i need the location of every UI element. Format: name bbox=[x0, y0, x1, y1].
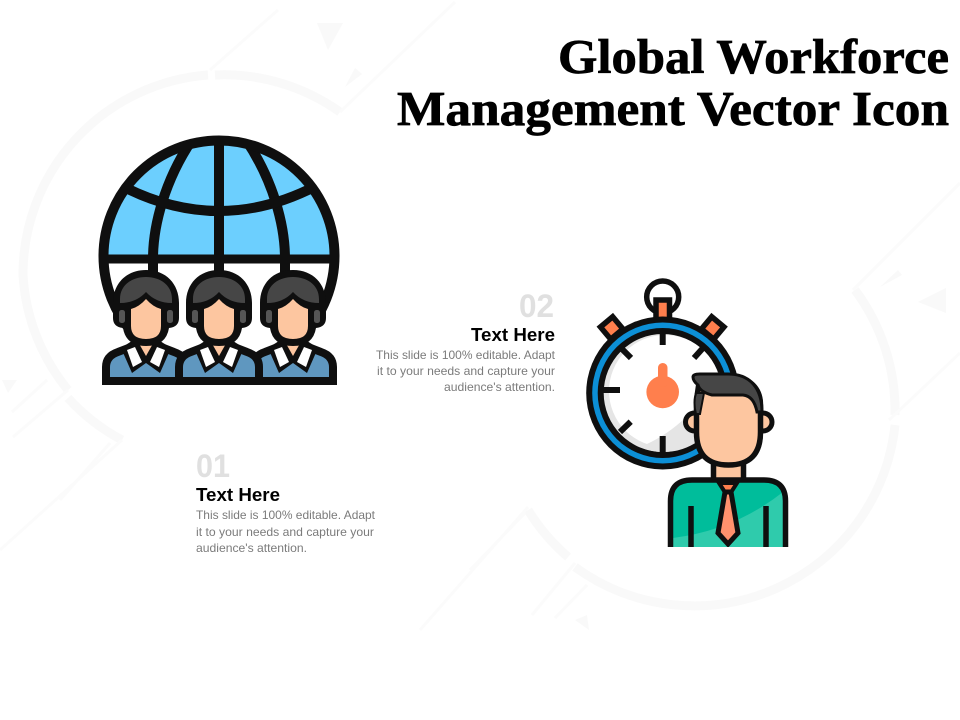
worker: left bbox=[106, 270, 186, 381]
icon: globe bbox=[98, 136, 340, 330]
text block 01: 01 bbox=[196, 448, 230, 484]
title: Management Vector Icon bbox=[397, 81, 949, 136]
icon: stopwatch bbox=[586, 281, 739, 470]
title bbox=[397, 29, 949, 136]
text block 01: This slide is 100% editable. Adapt bbox=[196, 508, 376, 522]
text block 02: 02 bbox=[519, 288, 554, 324]
text block 01 bbox=[196, 448, 376, 555]
text block 01: audience's attention. bbox=[196, 541, 307, 555]
text block 02: audience's attention. bbox=[444, 380, 555, 394]
icon: stopwatch with person bbox=[586, 281, 786, 560]
text block 01: Text Here bbox=[196, 485, 280, 505]
text block 02 bbox=[376, 288, 556, 394]
icon: person bbox=[670, 374, 786, 560]
worker: middle bbox=[179, 270, 259, 381]
icon: globe with three workers bbox=[100, 136, 338, 381]
text block 02: it to your needs and capture your bbox=[377, 364, 555, 378]
text block 02: Text Here bbox=[471, 325, 555, 345]
title: Global Workforce bbox=[558, 29, 949, 84]
text block 02: This slide is 100% editable. Adapt bbox=[376, 348, 556, 362]
worker: right bbox=[253, 270, 333, 381]
text block 01: it to your needs and capture your bbox=[196, 525, 374, 539]
